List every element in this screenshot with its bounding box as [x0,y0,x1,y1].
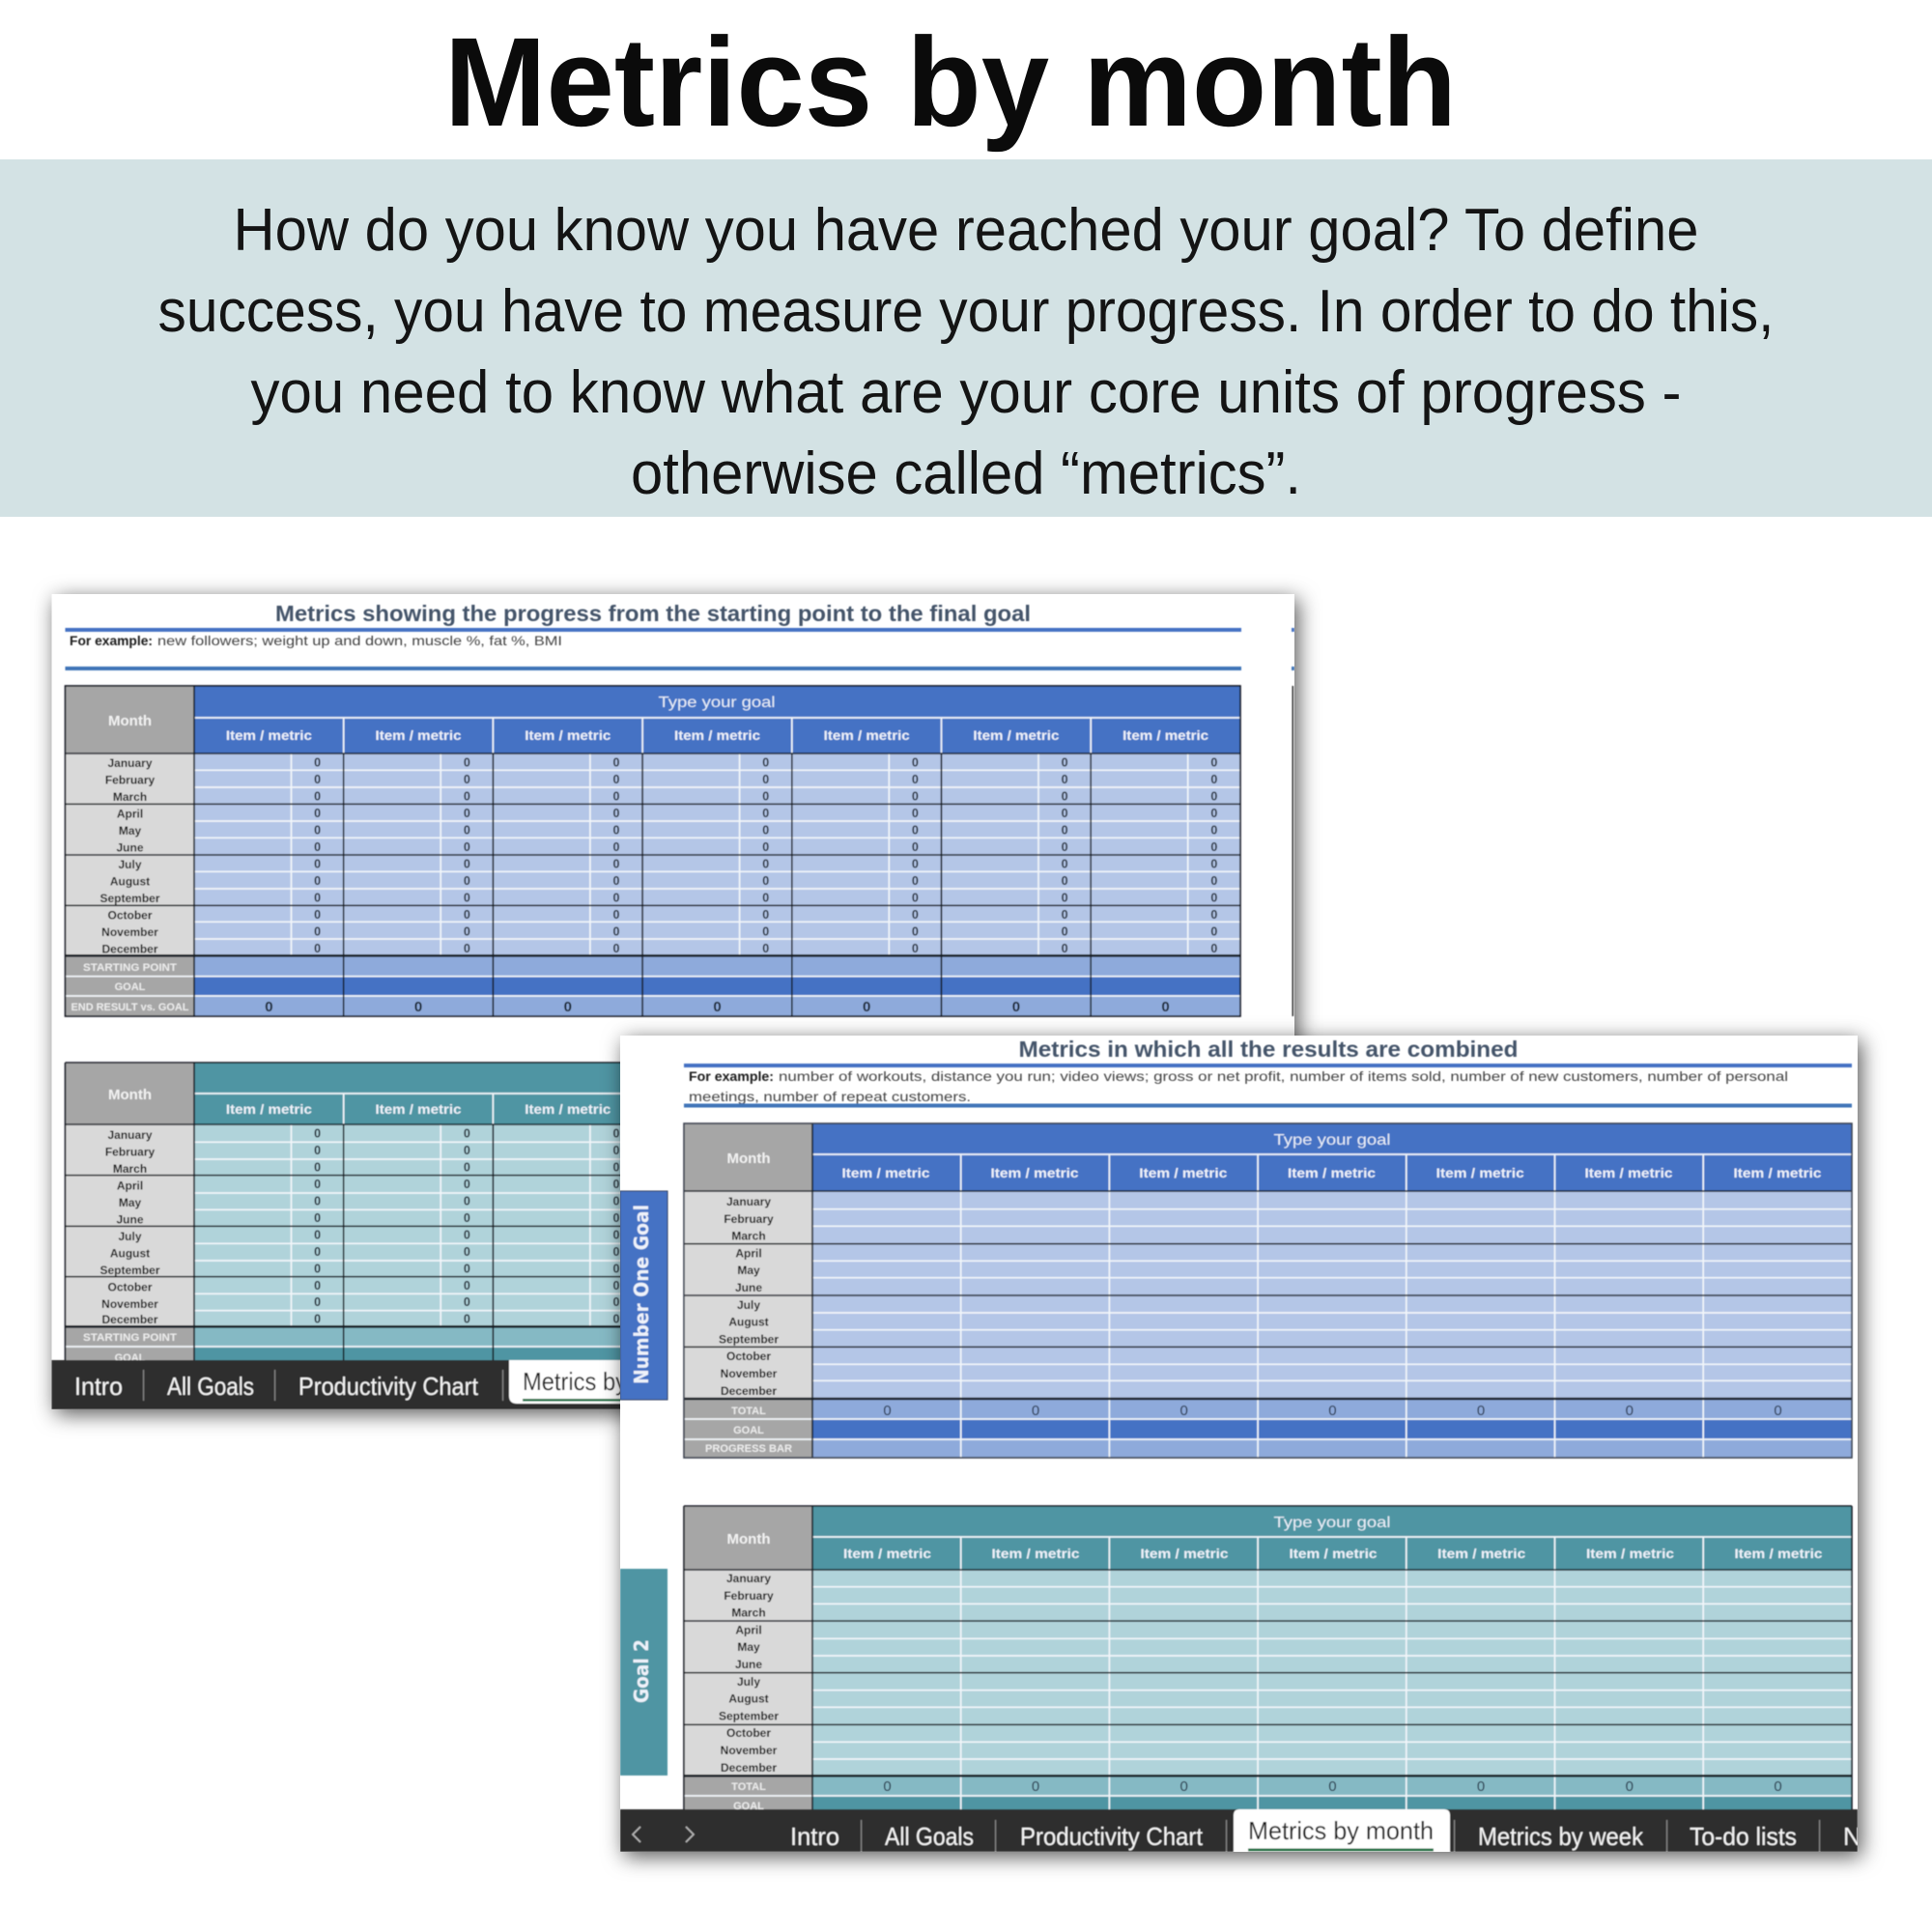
month values: 0 [1210,891,1217,904]
month values: 0 [613,1194,620,1208]
sheet tab bar B: Metrics by week [1478,1822,1644,1851]
summary row labels: STARTING POINT [83,1332,177,1344]
metric headers [226,729,1209,742]
month values: 0 [464,1211,470,1225]
month labels: May [119,824,141,838]
icon: previous arrow [633,1827,640,1842]
month values: 0 [1210,790,1217,804]
month labels: June [116,1213,144,1227]
month values: 0 [762,891,769,904]
month labels [99,756,160,956]
month values: 0 [1062,908,1068,922]
month values: 0 [464,823,470,837]
summary row labels: GOAL [733,1425,764,1436]
month values: 0 [1062,823,1068,837]
month labels: November [721,1367,778,1380]
month values [314,1127,620,1326]
month values: 0 [762,908,769,922]
month values: 0 [912,755,919,769]
panel B example text [689,1068,1788,1104]
month values: 0 [464,1194,470,1208]
month values: 0 [314,773,321,786]
active tab B [1234,1809,1450,1852]
month values: 0 [613,1295,620,1309]
month values: 0 [762,942,769,955]
month values: 0 [314,1127,321,1141]
month values: 0 [912,823,919,837]
label: number one goal: Number One Goal [630,1205,653,1384]
month labels: December [101,943,158,956]
summary row labels: END RESULT vs. GOAL [71,1002,189,1013]
metric headers: Item / metric [674,727,760,743]
month values: 0 [613,1262,620,1275]
panel A example text: new followers; weight up and down, muscle %, fat %, BMI [157,633,562,648]
month values: 0 [613,908,620,922]
label: goal 2: Goal 2 [630,1639,653,1703]
month labels: February [724,1212,774,1226]
month values: 0 [613,1228,620,1241]
month labels: September [719,1709,779,1722]
metric headers: Item / metric [1289,1546,1378,1561]
month values: 0 [1062,755,1068,769]
panel B example text: number of workouts, distance you run; video views; gross or net profit, number of items sold, number of new customers, number of personal [779,1068,1788,1084]
metric headers: Item / metric [1288,1165,1376,1180]
sheet tab bar B: Intro [790,1822,839,1851]
month values: 0 [464,773,470,786]
icon: next arrow [686,1827,694,1842]
month values: 0 [464,858,470,871]
total values: 0 [1626,1403,1634,1419]
month values: 0 [314,790,321,804]
panel A heading: Metrics showing the progress from the starting point to the final goal [275,601,1031,626]
month header: Month [108,713,152,729]
table: goal 1 with values [66,686,1240,1016]
panel B example text: meetings, number of repeat customers. [689,1089,971,1104]
month values: 0 [464,1295,470,1309]
active tab A [508,1359,620,1405]
month values: 0 [613,790,620,804]
month values: 0 [1210,942,1217,955]
month values: 0 [464,908,470,922]
month labels: February [105,773,155,786]
month values: 0 [314,908,321,922]
month values: 0 [613,874,620,888]
label: goal 2 [620,1569,668,1776]
month values: 0 [464,1144,470,1157]
intro band: otherwise called “metrics”. [631,440,1301,507]
month values: 0 [613,1313,620,1326]
month labels: March [731,1230,766,1243]
month values: 0 [314,840,321,854]
panel: spreadsheet combined results [620,1036,1861,1852]
goal header: Type your goal [1273,1515,1391,1531]
month labels: August [110,1246,150,1260]
month labels: April [117,1179,143,1192]
month labels: April [117,808,143,821]
month values: 0 [912,858,919,871]
month labels: February [105,1146,155,1159]
month values: 0 [464,1262,470,1275]
month values: 0 [314,755,321,769]
month values: 0 [613,773,620,786]
month values: 0 [762,874,769,888]
total values: 0 [883,1403,892,1419]
month values: 0 [314,874,321,888]
month values: 0 [464,807,470,820]
month labels: May [737,1264,760,1277]
month values: 0 [314,1228,321,1241]
month values: 0 [464,1228,470,1241]
month values: 0 [314,1161,321,1175]
month header: Month [727,1531,770,1548]
month values: 0 [314,925,321,939]
month labels: March [113,1162,147,1176]
month values: 0 [1210,874,1217,888]
metric headers: Item / metric [1139,1165,1228,1180]
month values: 0 [613,1144,620,1157]
total values: 0 [1032,1778,1039,1795]
month labels: August [728,1692,769,1706]
month values: 0 [762,858,769,871]
month values: 0 [613,1211,620,1225]
end result values: 0 [414,999,422,1015]
month values: 0 [314,1194,321,1208]
month values: 0 [1210,858,1217,871]
title: Metrics by month [444,11,1457,153]
month labels: January [726,1572,771,1585]
month values: 0 [464,942,470,955]
month labels [719,1195,779,1398]
total values [883,1405,1782,1416]
summary row labels: TOTAL [731,1406,766,1417]
month values: 0 [912,942,919,955]
panel B example text: For example: [689,1068,774,1084]
month values: 0 [1210,823,1217,837]
month values: 0 [1062,925,1068,939]
month values: 0 [613,891,620,904]
month values: 0 [314,1211,321,1225]
month values: 0 [464,1127,470,1141]
month labels: July [118,858,142,871]
month values: 0 [314,858,321,871]
sheet tab bar B: All Goals [885,1822,974,1851]
summary row labels [705,1406,792,1455]
metric headers: Item / metric [1586,1546,1674,1561]
month values: 0 [762,807,769,820]
month labels: July [737,1675,760,1689]
total values: 0 [1774,1778,1782,1795]
month labels: December [721,1384,777,1398]
month values: 0 [464,891,470,904]
month values: 0 [464,840,470,854]
month values: 0 [464,1313,470,1326]
month values: 0 [314,1262,321,1275]
month values: 0 [762,840,769,854]
month values: 0 [464,925,470,939]
active tab B: Metrics by month [1248,1816,1434,1845]
month values: 0 [1210,807,1217,820]
total values: 0 [1477,1778,1485,1795]
month values: 0 [613,1279,620,1293]
month values: 0 [762,790,769,804]
month values: 0 [1210,773,1217,786]
summary row labels: STARTING POINT [83,962,177,974]
total values: 0 [1477,1403,1485,1419]
sheet tab bar B: Productivity Chart [1020,1822,1204,1851]
metric headers: Item / metric [1733,1165,1822,1180]
month values: 0 [613,942,620,955]
month values: 0 [314,807,321,820]
month labels: May [119,1196,141,1209]
metric headers: Item / metric [843,1546,931,1561]
month labels: December [101,1313,158,1326]
month values: 0 [314,1279,321,1293]
end result values: 0 [1161,999,1170,1015]
summary row labels [731,1781,766,1812]
month values: 0 [1210,840,1217,854]
month labels: April [735,1246,762,1260]
month values: 0 [1062,891,1068,904]
end result values: 0 [713,999,722,1015]
goal header: Type your goal [659,695,775,711]
month values: 0 [1062,790,1068,804]
end result values [265,1001,1170,1012]
month values: 0 [464,1161,470,1175]
end result values: 0 [863,999,870,1015]
metric headers: Item / metric [1436,1165,1524,1180]
month labels: June [735,1658,762,1671]
total values: 0 [1032,1403,1039,1419]
month values: 0 [464,755,470,769]
panel: spreadsheet starting point to goal [52,594,1294,1409]
month labels: November [721,1744,778,1757]
metric headers: Item / metric [1735,1546,1823,1561]
month labels: December [721,1761,777,1775]
panel B heading: Metrics in which all the results are combined [1018,1037,1519,1062]
month values: 0 [314,942,321,955]
month header: Month [727,1151,770,1167]
table: goal 2 totals [684,1506,1852,1815]
month labels [719,1572,779,1775]
summary row labels [83,1333,178,1361]
metric headers: Item / metric [991,1546,1080,1561]
month labels: May [737,1640,760,1654]
sheet tab bar B: N [1843,1822,1861,1851]
summary row labels: TOTAL [731,1781,766,1793]
month values: 0 [762,755,769,769]
total values: 0 [883,1778,892,1795]
end result values: 0 [1012,999,1020,1015]
summary row labels [71,962,189,1013]
month values: 0 [1062,858,1068,871]
table: goal 2 with values [66,1063,677,1366]
month values: 0 [613,840,620,854]
month values: 0 [912,891,919,904]
summary row labels: GOAL [115,981,146,993]
summary row labels: PROGRESS BAR [705,1443,792,1455]
end result values: 0 [564,999,572,1015]
month values: 0 [464,1178,470,1191]
metric headers: Item / metric [226,727,312,743]
summary row labels: GOAL [733,1801,764,1812]
month labels: November [101,1297,158,1311]
metric headers: Item / metric [1584,1165,1673,1180]
month labels: September [719,1332,779,1346]
month values: 0 [1210,755,1217,769]
metric headers: Item / metric [1437,1546,1525,1561]
month labels: January [107,756,153,770]
total values: 0 [1180,1778,1188,1795]
month values: 0 [464,1245,470,1259]
month labels: September [99,1264,160,1277]
month labels: August [110,875,150,889]
month values: 0 [613,1161,620,1175]
total values: 0 [1328,1778,1337,1795]
month values: 0 [613,1178,620,1191]
month labels: June [116,840,144,854]
total values: 0 [1180,1403,1188,1419]
month values: 0 [912,840,919,854]
total values: 0 [1774,1403,1782,1419]
intro band: success, you have to measure your progress. In order to do this, [158,278,1774,345]
metric headers: Item / metric [991,1165,1079,1180]
month values: 0 [762,925,769,939]
sheet tab bar A: Productivity Chart [298,1372,479,1401]
month values: 0 [912,790,919,804]
sheet tab bar B [620,1809,1861,1852]
summary row labels: GOAL [115,1352,146,1364]
metric headers: Item / metric [375,1101,462,1117]
month values: 0 [314,1295,321,1309]
metric headers: Item / metric [1140,1546,1229,1561]
sheet tab bar A: Intro [74,1372,123,1401]
metric headers [842,1167,1822,1179]
month values: 0 [912,773,919,786]
metric headers: Item / metric [1122,727,1208,743]
month values: 0 [314,1178,321,1191]
metric headers: Item / metric [824,727,910,743]
intro band: How do you know you have reached your goal? To define [234,197,1698,264]
month labels: October [107,1281,153,1294]
month values: 0 [912,925,919,939]
month values: 0 [1062,773,1068,786]
month values: 0 [1210,925,1217,939]
month values: 0 [613,807,620,820]
month values: 0 [912,807,919,820]
month labels: January [726,1195,771,1208]
total values: 0 [1328,1403,1337,1419]
month values: 0 [613,858,620,871]
month values: 0 [613,823,620,837]
month values: 0 [613,755,620,769]
month values: 0 [314,1313,321,1326]
metric headers: Item / metric [375,727,462,743]
month values: 0 [1062,807,1068,820]
label: number one goal [620,1191,668,1400]
month labels: October [107,908,153,922]
sheet tab bar A: All Goals [167,1372,254,1401]
intro band [0,159,1932,517]
month labels: October [726,1726,771,1740]
panel A example text: For example: [70,633,153,648]
month values: 0 [464,874,470,888]
active tab A: Metrics by [523,1367,627,1396]
metric headers: Item / metric [842,1165,930,1180]
month values: 0 [762,823,769,837]
end result values: 0 [265,999,273,1015]
month values: 0 [1210,908,1217,922]
month values: 0 [762,773,769,786]
metric headers: Item / metric [525,727,611,743]
month values: 0 [912,874,919,888]
month values: 0 [314,1245,321,1259]
month values: 0 [314,1144,321,1157]
month labels: February [724,1589,774,1603]
total values [883,1778,1782,1795]
metric headers: Item / metric [525,1101,611,1117]
month labels: April [735,1623,762,1636]
sheet tab bar B: To-do lists [1690,1822,1797,1851]
metric headers [843,1546,1823,1561]
metric headers: Item / metric [973,727,1060,743]
metric headers [226,1103,611,1115]
month values [314,755,1217,955]
month values: 0 [314,891,321,904]
month values: 0 [613,1127,620,1141]
month values: 0 [1062,874,1068,888]
month labels: November [101,925,158,939]
month values: 0 [1062,942,1068,955]
month labels: October [726,1350,771,1363]
month labels: August [728,1316,769,1329]
month labels: March [113,790,147,804]
month labels: September [99,892,160,905]
month values: 0 [912,908,919,922]
month values: 0 [613,1245,620,1259]
metric headers: Item / metric [226,1101,312,1117]
month values: 0 [1062,840,1068,854]
month values: 0 [464,1279,470,1293]
month labels: January [107,1128,153,1142]
month values: 0 [613,925,620,939]
goal header: Type your goal [1273,1132,1391,1149]
table: goal 1 totals [684,1123,1852,1458]
intro band: you need to know what are your core units of progress - [251,359,1681,426]
sheet tab bar A [51,1359,620,1409]
month labels: July [737,1298,760,1312]
total values: 0 [1626,1778,1634,1795]
month header: Month [108,1087,152,1103]
month values: 0 [314,823,321,837]
month labels: March [731,1606,766,1620]
month labels: July [118,1230,142,1243]
month values: 0 [464,790,470,804]
month labels [99,1128,160,1326]
month labels: June [735,1281,762,1294]
